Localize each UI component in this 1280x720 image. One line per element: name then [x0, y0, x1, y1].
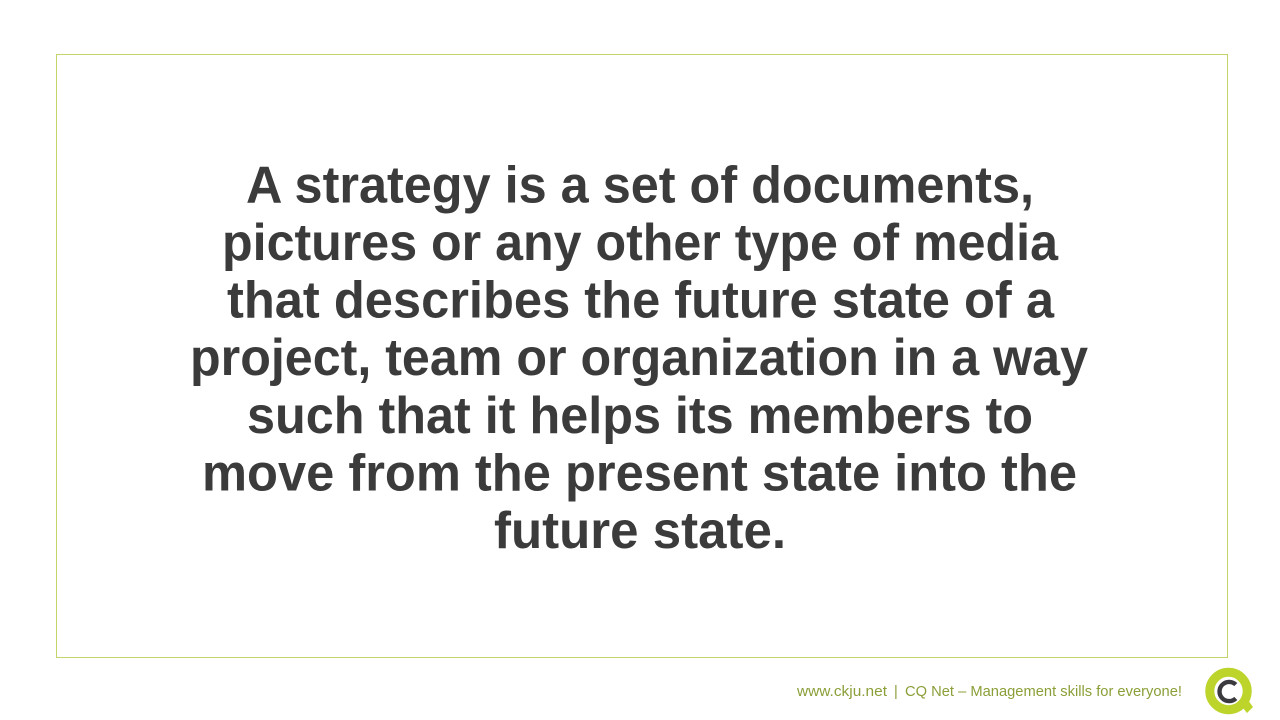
heading: strategy definition: such that it helps its members to [247, 387, 1033, 445]
footer text: website and tagline: CQ Net – Management skills for everyone! [905, 684, 1182, 700]
heading: strategy definition: future state. [494, 502, 786, 560]
heading: strategy definition: A strategy is a set of documents, [246, 156, 1034, 214]
panel: framed border [56, 54, 1228, 658]
heading: strategy definition: that describes the future state of a [227, 272, 1055, 330]
heading: strategy definition: project, team or organization in a way [190, 329, 1088, 387]
heading: strategy definition: move from the present state into the [202, 444, 1077, 502]
footer text: website and tagline: | [894, 684, 898, 700]
icon: CQ logo [1210, 672, 1253, 713]
footer text: website and tagline: www.ckju.net [796, 684, 887, 700]
heading: strategy definition [190, 156, 1088, 560]
heading: strategy definition: pictures or any other type of media [222, 214, 1059, 272]
